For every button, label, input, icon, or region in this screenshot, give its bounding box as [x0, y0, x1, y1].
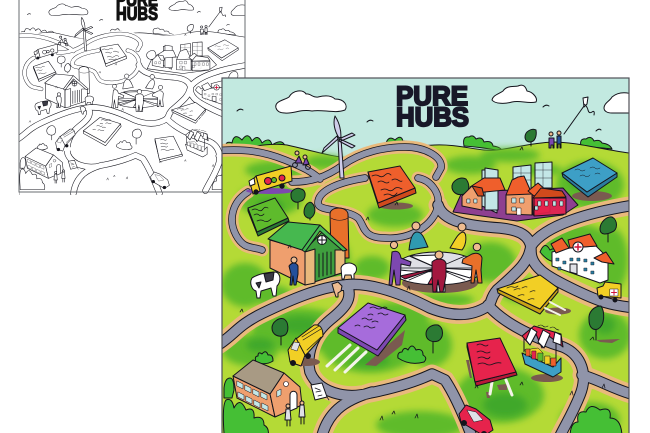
delivery truck: [246, 166, 294, 194]
tree right: [589, 306, 620, 343]
market stall: [522, 325, 563, 382]
roads: [215, 147, 635, 433]
hill bush 4: [581, 137, 612, 149]
deeper green watercolour patches: [246, 173, 615, 417]
title: Pure Hubs: [396, 81, 469, 132]
book: green: [248, 198, 289, 236]
tree centre: [426, 325, 442, 353]
book: orange: [368, 166, 416, 210]
hill bush 1: [226, 136, 293, 150]
person: orange: [462, 243, 482, 283]
kite and flyers: [549, 97, 594, 148]
bush near farm: [255, 352, 273, 364]
sketch frame: [19, 0, 245, 192]
hill bush 3: [464, 136, 502, 151]
farmer: [289, 257, 298, 285]
roundtable hub: [395, 252, 479, 293]
sign board: [311, 383, 329, 400]
person: yellow: [450, 223, 466, 250]
sky: [222, 78, 628, 157]
green watercolour patches: [221, 148, 631, 433]
tree small pair: [291, 188, 315, 220]
panel: full colour map: [215, 78, 635, 433]
book: yellow: [497, 275, 571, 315]
book: blue: [562, 158, 617, 201]
bush bottom right: [570, 406, 622, 433]
sketch title second line: HUBS: [116, 4, 158, 24]
tree left of bus: [272, 319, 288, 345]
book: purple: [327, 303, 406, 372]
sheep: [341, 263, 356, 279]
silo: [330, 208, 349, 258]
people by library: [285, 401, 305, 426]
cloud far right: [604, 93, 632, 113]
title: Pure Hubs: PURE: [396, 81, 468, 111]
colour panel frame: [222, 78, 629, 433]
grass ticks: [240, 147, 605, 420]
cloud centre right: [492, 85, 536, 103]
book: red: [466, 338, 517, 398]
red car: [459, 405, 493, 433]
person: teal: [409, 222, 428, 250]
hospital: [540, 234, 614, 283]
ground: [222, 142, 629, 433]
barn: [268, 222, 347, 285]
tree on hill: [525, 129, 536, 146]
bush bottom left: [223, 399, 268, 433]
hill bush 2: [381, 137, 410, 152]
cloud left: [276, 91, 346, 113]
panel: black-and-white line sketch of the map: [15, 0, 248, 196]
person: purple: [389, 241, 411, 285]
birds: [237, 105, 601, 131]
library building: [224, 360, 302, 417]
town on purple base: [452, 162, 578, 221]
title: Pure Hubs: HUBS: [396, 102, 469, 132]
small pig on road: [332, 282, 342, 297]
cow: [251, 272, 280, 298]
school bus: [288, 325, 323, 366]
tree right of hospital: [600, 217, 616, 242]
person: maroon: [432, 251, 446, 292]
ambulance: [597, 282, 621, 302]
cyclists: [293, 151, 310, 169]
wind turbine: [322, 116, 355, 178]
bush centre: [398, 346, 426, 363]
